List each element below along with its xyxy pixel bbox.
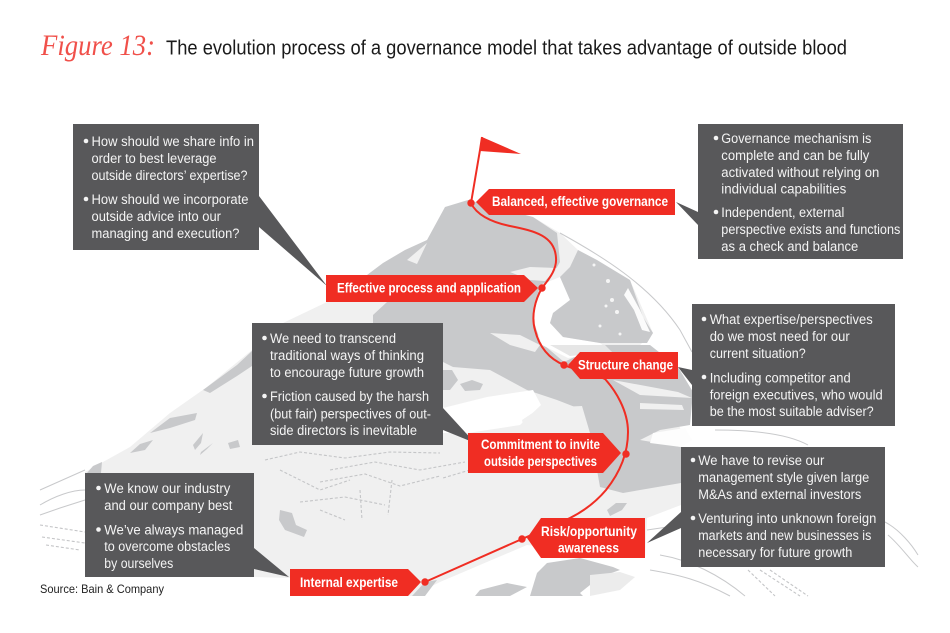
dark island [550, 250, 653, 343]
callout: how to share info: How should we share info in [92, 134, 254, 149]
callout: we know our industry: We’ve always managed [104, 522, 243, 538]
callout: transcend traditional thinking: traditional ways of thinking [270, 348, 424, 363]
callout: transcend traditional thinking [252, 323, 475, 445]
label: commitment to invite outside perspectives: outside perspectives [484, 454, 597, 469]
label: risk/opportunity awareness: awareness [558, 540, 619, 556]
callout: transcend traditional thinking: We need to transcend [270, 331, 396, 346]
dark massif [367, 200, 693, 493]
callout: revise management style [647, 447, 885, 567]
callout: transcend traditional thinking: to encourage future growth [270, 365, 424, 380]
thin outlines and coastlines [40, 233, 918, 596]
label: commitment to invite outside perspectives [468, 433, 621, 473]
label: structure change [568, 352, 678, 379]
callout: how to share info: How should we incorporate [92, 192, 248, 207]
ridge streaks [203, 351, 252, 393]
icon: summit flag [480, 137, 521, 154]
callout: transcend traditional thinking: side directors is inevitable [270, 423, 417, 438]
label: risk/opportunity awareness [527, 518, 645, 558]
label: balanced, effective governance: Balanced, effective governance [492, 194, 668, 209]
callout: revise management style: management style given large [698, 470, 869, 485]
callout: we know our industry: by ourselves [104, 556, 174, 571]
callout: governance mechanism: Governance mechanism is [721, 131, 872, 146]
callout: we know our industry: We know our industry [104, 481, 231, 496]
label: internal expertise [290, 569, 421, 596]
callout: revise management style: We have to revise our [698, 453, 825, 468]
callout: governance mechanism: complete and can be fully [721, 148, 870, 163]
callout: what expertise is needed [678, 304, 895, 426]
callout: transcend traditional thinking: (but fair) perspectives of out- [270, 406, 431, 422]
callout: how to share info: outside advice into our [92, 209, 221, 224]
callout: governance mechanism: individual capabilities [721, 182, 847, 196]
callout: revise management style: necessary for future growth [698, 545, 852, 560]
callout: we know our industry: and our company best [104, 498, 233, 513]
route milestones [421, 199, 630, 586]
callout: transcend traditional thinking: Friction caused by the harsh [270, 389, 429, 404]
callout: what expertise is needed: What expertise/perspectives [710, 312, 873, 327]
title: Figure 13: [40, 29, 155, 62]
climbing route with flag [471, 137, 521, 203]
title: The evolution process of a governance model that takes advantage of outside blood [166, 38, 847, 60]
label: commitment to invite outside perspectives: Commitment to invite [481, 437, 600, 452]
callout: revise management style: markets and new businesses is [698, 528, 872, 543]
callout: what expertise is needed: be the most suitable adviser? [710, 404, 874, 419]
title [40, 29, 847, 62]
label: risk/opportunity awareness: Risk/opportunity [541, 524, 637, 539]
callout: what expertise is needed: foreign executives, who would [710, 388, 883, 402]
callout: how to share info [73, 124, 327, 286]
callout: governance mechanism: Independent, external [721, 205, 844, 220]
callout: what expertise is needed: do we most need for our [710, 329, 850, 344]
source note: Source: Bain & Company [40, 582, 164, 596]
callout: we know our industry: to overcome obstacles [104, 539, 231, 554]
callout: we know our industry [85, 473, 289, 577]
callout: governance mechanism [676, 124, 903, 259]
callout: what expertise is needed: current situation? [710, 346, 806, 361]
label: balanced, effective governance [476, 189, 675, 215]
callout: how to share info: managing and execution? [92, 226, 240, 241]
label: effective process and application [326, 275, 538, 302]
white gap between route and island [533, 277, 612, 358]
callout: revise management style: Venturing into unknown foreign [698, 511, 876, 526]
callout: how to share info: order to best leverage [92, 151, 216, 166]
label: structure change: Structure change [578, 358, 673, 372]
callout: governance mechanism: as a check and balance [721, 239, 858, 254]
callout: revise management style: M&As and external investors [698, 487, 862, 502]
callout: governance mechanism: activated without relying on [721, 165, 879, 180]
label: effective process and application: Effective process and application [337, 280, 521, 296]
mountain illustration [40, 200, 918, 596]
callout: how to share info: outside directors’ expertise? [92, 168, 248, 183]
callout: governance mechanism: perspective exists and functions [721, 222, 901, 237]
callout: what expertise is needed: Including competitor and [710, 370, 851, 386]
label: internal expertise: Internal expertise [300, 575, 398, 590]
route line [425, 203, 628, 582]
